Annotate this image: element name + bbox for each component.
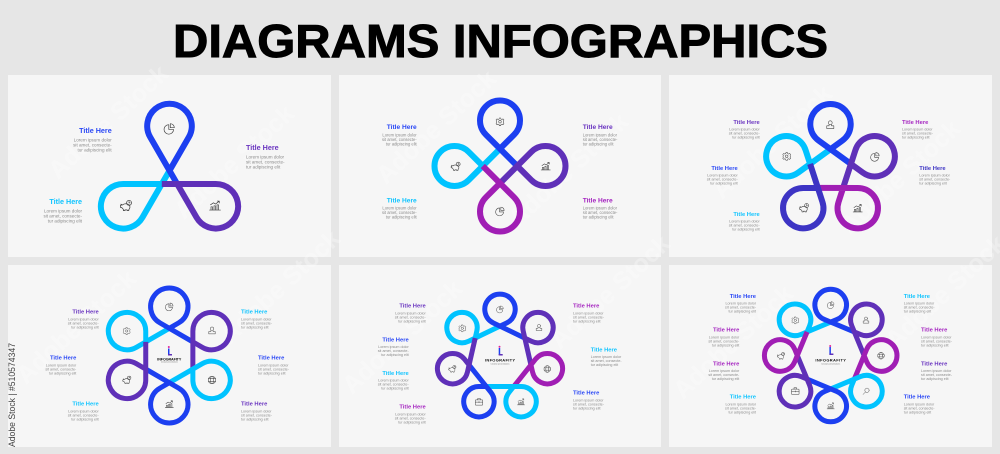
text: blue title: sit amet, consecte- <box>45 367 77 371</box>
text: purple title: Title Here <box>246 143 279 152</box>
text: blue title: Title Here <box>258 356 285 362</box>
panel: six loops <box>8 225 346 447</box>
text: blue title: sit amet, consecte- <box>258 367 290 371</box>
text: cyan title: Lorem ipsum dolor <box>904 302 935 306</box>
text: cyan title: Lorem ipsum dolor <box>68 409 99 413</box>
text: blue title: Lorem ipsum dolor <box>725 302 757 306</box>
text: blue title <box>573 391 605 410</box>
center logo: INFOGRAFITY <box>157 358 182 362</box>
loop: purple <box>154 158 246 237</box>
text: blue title: sit amet, consecte- <box>573 402 605 406</box>
text: purple title: tur adipiscing elit <box>398 319 426 323</box>
center logo: Creative presentations <box>491 362 510 365</box>
text: magenta title <box>583 197 618 220</box>
text: magenta title: tur adipiscing elit <box>573 319 600 323</box>
text: magenta title: Lorem ipsum dolor <box>902 128 933 132</box>
text: cyan title: sit amet, consecte- <box>591 359 622 363</box>
text: purple title <box>246 143 285 170</box>
text: purple title: Title Here <box>733 120 760 126</box>
text: magenta title: tur adipiscing elit <box>712 377 739 381</box>
panel: five loops: Adobe Stock <box>835 115 966 239</box>
text: cyan title <box>68 402 99 421</box>
loop: purple lower left <box>99 342 167 405</box>
text: blue title: Title Here <box>387 124 417 131</box>
loop: magenta <box>480 166 520 232</box>
panel: three loops: Adobe Stock <box>43 60 174 184</box>
loop: blue <box>480 100 520 166</box>
loop: blue top <box>485 294 525 338</box>
text: magenta title: Title Here <box>921 328 948 334</box>
text: purple title: Lorem ipsum dolor <box>395 311 426 315</box>
loop: magenta left <box>764 332 807 371</box>
loop: blue bottom left <box>450 365 505 422</box>
text: blue title: sit amet, consecte- <box>73 143 112 148</box>
text: blue title: tur adipiscing elit <box>49 371 76 375</box>
text: blue title <box>258 356 290 375</box>
loop: cyan lower right <box>169 346 237 410</box>
text: blue title: sit amet, consecte- <box>378 349 409 353</box>
text: purple title: tur adipiscing elit <box>71 325 99 329</box>
icon: piggy bank <box>120 200 131 211</box>
panel: eight loops <box>668 230 1000 447</box>
text: magenta title: Lorem ipsum dolor <box>709 335 740 339</box>
text: blue title: Lorem ipsum dolor <box>904 402 935 406</box>
loop: magenta right <box>514 347 566 396</box>
text: cyan title: Lorem ipsum dolor <box>729 220 760 224</box>
panel: six loops: Adobe Stock <box>11 265 142 389</box>
loop: indigo <box>775 164 843 236</box>
text: blue title: Title Here <box>730 294 757 300</box>
text: blue title: tur adipiscing elit <box>904 410 931 414</box>
icon: piggy bank <box>777 352 785 359</box>
knot: four loops <box>434 100 566 232</box>
text: purple title: sit amet, consecte- <box>395 315 426 319</box>
icon: pie chart <box>871 153 879 161</box>
text: magenta title <box>921 328 953 347</box>
text: cyan title: sit amet, consecte- <box>729 224 760 228</box>
icon: user <box>863 317 869 323</box>
loop: blue <box>147 104 192 184</box>
text: cyan title: Title Here <box>591 347 618 353</box>
center logo <box>157 346 182 364</box>
knot: eight loops <box>764 289 897 422</box>
icon: piggy bank <box>451 162 460 170</box>
text: blue title: sit amet, consecte- <box>725 306 757 310</box>
text: magenta title: sit amet, consecte- <box>395 416 426 420</box>
text: blue title <box>378 337 409 357</box>
text: blue title: Title Here <box>573 391 600 397</box>
text: purple title: Title Here <box>399 304 426 310</box>
panel: four loops <box>339 65 661 257</box>
icon: gear <box>496 118 504 126</box>
text: magenta title: sit amet, consecte- <box>902 132 934 136</box>
knot: seven loops <box>432 294 566 426</box>
text: purple title <box>583 124 618 146</box>
text: cyan title <box>382 197 418 220</box>
text: cyan title: sit amet, consecte- <box>378 383 409 387</box>
loop: cyan <box>761 131 831 188</box>
text: magenta title: Lorem ipsum dolor <box>573 311 604 315</box>
panel: seven loops: Adobe Stock <box>545 230 676 354</box>
text: cyan title <box>43 197 83 223</box>
text: magenta title <box>902 120 934 140</box>
text: purple title <box>395 304 426 323</box>
text: cyan title: Title Here <box>904 294 931 300</box>
text: blue title: sit amet, consecte- <box>382 137 417 142</box>
text: magenta title: tur adipiscing elit <box>712 343 739 347</box>
vertical stock credit: Adobe Stock | #510574347 <box>7 343 17 447</box>
icon: user <box>827 121 834 129</box>
text: magenta title: Title Here <box>573 304 600 310</box>
text: indigo title: Lorem ipsum dolor <box>919 174 951 178</box>
text: blue title: Lorem ipsum dolor <box>382 132 417 137</box>
text: cyan title: Title Here <box>49 197 82 206</box>
knot: three loops <box>93 104 246 237</box>
text: magenta title <box>708 328 740 347</box>
text: cyan title: Lorem ipsum dolor <box>725 402 757 406</box>
text: magenta title: tur adipiscing elit <box>398 420 426 424</box>
text: cyan title: Title Here <box>72 402 99 408</box>
text: magenta title: sit amet, consecte- <box>708 339 740 343</box>
loop: cyan bottom right <box>486 369 541 426</box>
text: purple title: Lorem ipsum dolor <box>246 155 285 160</box>
icon: bar chart <box>541 162 550 170</box>
icon: pie chart <box>165 303 173 311</box>
text: cyan title: Title Here <box>241 310 268 316</box>
text: magenta title: tur adipiscing elit <box>583 215 614 220</box>
text: magenta title: tur adipiscing elit <box>902 136 929 140</box>
panel: five loops <box>669 75 992 257</box>
loop: magenta <box>818 164 886 236</box>
text: cyan title: tur adipiscing elit <box>241 325 268 329</box>
panel: three loops: Adobe Stock <box>169 100 300 224</box>
text: blue title: tur adipiscing elit <box>77 148 112 153</box>
text: blue title: tur adipiscing elit <box>729 310 756 314</box>
knot: five loops <box>761 104 900 236</box>
text: blue title <box>45 356 77 375</box>
text: cyan title: sit amet, consecte- <box>725 406 757 410</box>
text: purple title <box>729 120 760 140</box>
text: blue title: Lorem ipsum dolor <box>258 363 289 367</box>
text: cyan title: tur adipiscing elit <box>732 228 760 232</box>
icon: gear <box>783 153 791 160</box>
icon: gear <box>459 325 466 332</box>
text: cyan title <box>241 310 273 329</box>
text: purple title: Lorem ipsum dolor <box>729 128 760 132</box>
text: blue title: sit amet, consecte- <box>904 406 935 410</box>
text: purple title: Lorem ipsum dolor <box>68 317 99 321</box>
text: cyan title: Title Here <box>730 395 757 401</box>
loop: magenta right <box>854 340 897 379</box>
text: blue title: Lorem ipsum dolor <box>707 174 738 178</box>
text: cyan title: tur adipiscing elit <box>591 363 618 367</box>
loop: blue top <box>815 289 854 332</box>
icon: bar chart <box>210 201 220 210</box>
text: purple title: Title Here <box>921 361 948 367</box>
text: magenta title: Lorem ipsum dolor <box>709 369 740 373</box>
text: blue title <box>707 166 738 186</box>
loop: purple <box>831 131 900 188</box>
icon: piggy bank <box>123 376 131 384</box>
text: cyan title: tur adipiscing elit <box>729 410 756 414</box>
loop: cyan <box>93 158 185 237</box>
icon: briefcase <box>792 388 799 394</box>
text: indigo title: tur adipiscing elit <box>919 182 947 186</box>
panel: four loops: Adobe Stock <box>503 108 634 232</box>
text: purple title: tur adipiscing elit <box>241 417 268 421</box>
text: blue title <box>725 294 757 314</box>
text: cyan title: Lorem ipsum dolor <box>44 208 82 213</box>
text: blue title: tur adipiscing elit <box>573 406 600 410</box>
text: magenta title: Lorem ipsum dolor <box>395 412 426 416</box>
text: blue title: tur adipiscing elit <box>710 182 738 186</box>
text: cyan title: Title Here <box>382 371 409 377</box>
loop: cyan upper left <box>101 301 169 365</box>
text: purple title <box>241 402 273 421</box>
text: cyan title <box>725 395 757 414</box>
icon: globe <box>878 352 884 359</box>
text: cyan title: tur adipiscing elit <box>71 417 99 421</box>
text: cyan title: tur adipiscing elit <box>48 218 83 223</box>
text: magenta title: Title Here <box>399 405 426 411</box>
text: cyan title: Lorem ipsum dolor <box>241 317 272 321</box>
loop: purple upper right <box>836 297 894 356</box>
text: magenta title: sit amet, consecte- <box>708 373 740 377</box>
text: cyan title: tur adipiscing elit <box>381 387 409 391</box>
text: cyan title: Title Here <box>387 197 417 204</box>
center logo: INFOGRAFITY <box>815 357 846 362</box>
text: cyan title <box>378 371 409 391</box>
text: magenta title: sit amet, consecte- <box>573 315 605 319</box>
icon: briefcase <box>475 399 483 405</box>
panel: four loops: Adobe Stock <box>371 65 502 189</box>
text: blue title: Title Here <box>711 166 738 172</box>
icon: gear <box>123 328 130 335</box>
text: cyan title <box>904 294 935 314</box>
text: purple title: tur adipiscing elit <box>921 377 948 381</box>
text: cyan title: sit amet, consecte- <box>241 321 273 325</box>
panel: eight loops: Adobe Stock <box>668 280 799 404</box>
text: cyan title: sit amet, consecte- <box>382 210 417 215</box>
center logo <box>485 346 515 365</box>
panel: six loops: Adobe Stock <box>215 225 346 349</box>
loop: purple left <box>432 338 484 387</box>
text: indigo title: Title Here <box>919 166 946 172</box>
text: blue title: tur adipiscing elit <box>381 353 409 357</box>
text: blue title: Title Here <box>904 395 931 401</box>
text: blue title: Lorem ipsum dolor <box>573 398 604 402</box>
text: cyan title: Title Here <box>733 212 760 218</box>
text: cyan title: Lorem ipsum dolor <box>378 379 409 383</box>
text: cyan title <box>591 347 622 367</box>
text: magenta title: sit amet, consecte- <box>583 210 618 215</box>
text: cyan title: tur adipiscing elit <box>904 310 931 314</box>
text: blue title: Lorem ipsum dolor <box>74 138 112 143</box>
text: magenta title: Lorem ipsum dolor <box>583 206 618 211</box>
text: purple title: Title Here <box>72 310 99 316</box>
text: blue title: Lorem ipsum dolor <box>378 345 409 349</box>
text: cyan title: sit amet, consecte- <box>43 213 82 218</box>
text: indigo title <box>919 166 951 186</box>
panel: seven loops <box>337 230 676 447</box>
loop: cyan upper left <box>441 299 500 357</box>
icon: piggy bank <box>800 204 809 212</box>
text: purple title: tur adipiscing elit <box>732 136 760 140</box>
text: magenta title <box>573 304 605 323</box>
panel: five loops: Adobe Stock <box>707 80 838 204</box>
text: blue title <box>382 124 418 146</box>
icon: pie chart <box>827 302 834 309</box>
text: purple title: sit amet, consecte- <box>583 137 618 142</box>
text: purple title: sit amet, consecte- <box>68 321 99 325</box>
loop: blue <box>810 104 851 164</box>
text: cyan title: Lorem ipsum dolor <box>382 206 417 211</box>
icon: piggy bank <box>449 365 456 372</box>
text: purple title: sit amet, consecte- <box>241 413 273 417</box>
loop: cyan lower right <box>831 361 889 419</box>
center logo: INFOGRAFITY <box>485 357 515 362</box>
text: magenta title <box>708 361 740 381</box>
text: blue title: tur adipiscing elit <box>258 371 285 375</box>
icon: bar chart <box>165 401 173 408</box>
text: indigo title: sit amet, consecte- <box>919 178 951 182</box>
icon: user <box>209 327 215 334</box>
text: magenta title: Title Here <box>713 361 740 367</box>
text: cyan title <box>729 212 760 232</box>
loop: purple <box>500 146 566 186</box>
icon: bar chart <box>827 403 834 409</box>
icon: pie chart <box>496 306 503 313</box>
loop: cyan <box>434 146 500 186</box>
icon: bar chart <box>517 399 525 405</box>
text: purple title: tur adipiscing elit <box>583 141 614 146</box>
panel: seven loops: Adobe Stock <box>337 275 468 399</box>
text: cyan title: tur adipiscing elit <box>386 215 418 220</box>
text: purple title <box>68 310 99 329</box>
text: blue title <box>904 395 935 414</box>
center logo: Creative presentations <box>161 361 178 364</box>
text: blue title <box>73 126 112 153</box>
text: blue title: sit amet, consecte- <box>707 178 738 182</box>
loop: purple upper right <box>172 306 240 369</box>
loop: purple lower left <box>767 356 825 414</box>
loop: blue bottom <box>807 379 846 422</box>
center logo <box>815 345 846 365</box>
loop: blue bottom <box>146 369 188 423</box>
panel: three loops <box>8 60 331 257</box>
text: purple title: sit amet, consecte- <box>246 160 285 165</box>
center logo: Creative presentations <box>821 362 840 365</box>
icon: bar chart <box>853 204 862 212</box>
text: magenta title: Title Here <box>902 120 929 126</box>
icon: gear <box>792 317 799 324</box>
text: blue title: Lorem ipsum dolor <box>46 363 77 367</box>
text: cyan title: sit amet, consecte- <box>904 306 935 310</box>
text: blue title: Title Here <box>79 126 112 135</box>
icon: pie chart <box>164 124 174 134</box>
text: magenta title: Lorem ipsum dolor <box>921 335 952 339</box>
text: purple title: Title Here <box>241 402 268 408</box>
text: purple title: Lorem ipsum dolor <box>921 369 952 373</box>
loop: cyan upper left <box>773 292 831 350</box>
knot: six loops <box>99 288 240 423</box>
text: purple title: sit amet, consecte- <box>729 132 760 136</box>
text: magenta title: Title Here <box>583 197 613 204</box>
text: blue title: Title Here <box>50 356 77 362</box>
text: blue title: tur adipiscing elit <box>386 141 418 146</box>
text: magenta title <box>395 405 426 424</box>
text: magenta title: tur adipiscing elit <box>921 343 948 347</box>
text: magenta title: sit amet, consecte- <box>921 339 953 343</box>
text: purple title: Lorem ipsum dolor <box>241 409 272 413</box>
text: cyan title: sit amet, consecte- <box>68 413 99 417</box>
icon: globe <box>208 376 216 384</box>
text: blue title: Title Here <box>382 337 409 343</box>
text: purple title <box>921 361 953 381</box>
text: purple title: Lorem ipsum dolor <box>583 132 618 137</box>
icon: pie chart <box>496 207 504 216</box>
text: magenta title: Title Here <box>713 328 740 334</box>
text: purple title: tur adipiscing elit <box>246 165 281 170</box>
icon: search <box>863 388 869 394</box>
loop: blue top <box>151 288 193 342</box>
text: purple title: sit amet, consecte- <box>921 373 953 377</box>
loop: purple upper right <box>506 306 565 365</box>
title: DIAGRAMS INFOGRAPHICS <box>173 15 828 67</box>
icon: globe <box>544 366 551 372</box>
icon: user <box>536 324 542 331</box>
text: purple title: Title Here <box>583 124 613 131</box>
text: cyan title: Lorem ipsum dolor <box>591 355 622 359</box>
